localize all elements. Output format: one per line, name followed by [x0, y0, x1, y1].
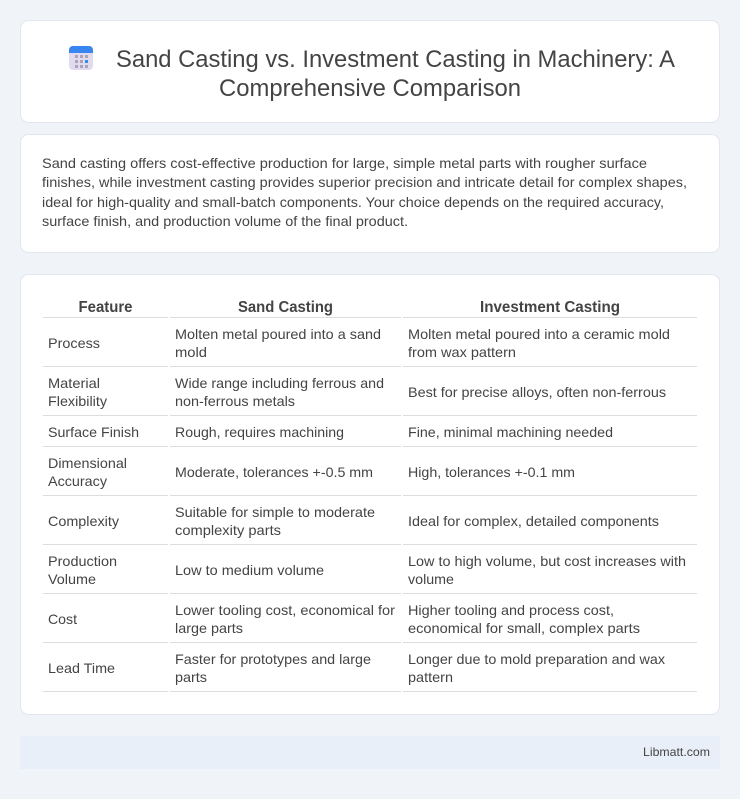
row: process: Molten metal poured into a ceramic mold — [408, 326, 670, 342]
row: lead time — [48, 651, 665, 685]
row: dimensional accuracy — [48, 455, 575, 489]
row: cost: Higher tooling and process cost, — [408, 602, 614, 618]
row: dimensional accuracy: Dimensional — [48, 455, 127, 471]
row: cost: large parts — [175, 620, 243, 636]
row: complexity: Complexity — [48, 513, 119, 529]
table header — [78, 299, 620, 316]
footer credit: Libmatt.com — [643, 745, 710, 759]
table header: Feature — [78, 299, 133, 316]
row: process: from wax pattern — [408, 344, 516, 360]
row: lead time: pattern — [408, 669, 453, 685]
row: surface finish: Surface Finish — [48, 424, 139, 440]
row: dimensional accuracy: Moderate, tolerances +-0.5 mm — [175, 464, 373, 480]
row: dimensional accuracy: High, tolerances +-0.1 mm — [408, 464, 575, 480]
panel: introduction — [20, 134, 720, 252]
row: lead time: Faster for prototypes and large — [175, 651, 371, 667]
intro text: surface finish, and production volume of the final product. — [42, 213, 408, 229]
row: process — [48, 326, 670, 360]
row: process: mold — [175, 344, 207, 360]
row: process: Process — [48, 335, 100, 351]
row: complexity: complexity parts — [175, 522, 281, 538]
row: production volume — [48, 553, 686, 587]
row: surface finish: Fine, minimal machining needed — [408, 424, 613, 440]
row: production volume: Low to medium volume — [175, 562, 324, 578]
table header: Investment Casting — [480, 299, 620, 316]
row: material flexibility: Material — [48, 375, 100, 391]
row: lead time: parts — [175, 669, 207, 685]
row: production volume: volume — [408, 571, 454, 587]
row: production volume: Volume — [48, 571, 96, 587]
row: cost — [48, 602, 640, 636]
title: Sand Casting vs. Investment Casting in Machinery: A — [116, 46, 675, 73]
row: material flexibility: Flexibility — [48, 393, 107, 409]
row: complexity — [48, 504, 659, 538]
row: production volume: Production — [48, 553, 117, 569]
row: surface finish — [48, 424, 613, 440]
intro text — [42, 155, 687, 229]
row: cost: Lower tooling cost, economical for — [175, 602, 395, 618]
icon: calendar — [69, 46, 93, 70]
row: process: Molten metal poured into a sand — [175, 326, 381, 342]
row: cost: economical for small, complex parts — [408, 620, 640, 636]
table header: Sand Casting — [238, 299, 333, 316]
intro text: Sand casting offers cost-effective production for large, simple metal parts with rougher surface — [42, 155, 647, 171]
panel: title card — [20, 20, 720, 122]
row: lead time: Lead Time — [48, 660, 115, 676]
row: material flexibility: non-ferrous metals — [175, 393, 295, 409]
row: complexity: Ideal for complex, detailed components — [408, 513, 659, 529]
row: complexity: Suitable for simple to moderate — [175, 504, 375, 520]
panel: comparison table — [20, 274, 720, 714]
row: cost: Cost — [48, 611, 77, 627]
row: production volume: Low to high volume, but cost increases with — [408, 553, 686, 569]
footer — [20, 736, 720, 769]
row: material flexibility — [48, 375, 666, 409]
row: material flexibility: Best for precise alloys, often non-ferrous — [408, 384, 666, 400]
title — [116, 46, 675, 102]
row: material flexibility: Wide range including ferrous and — [175, 375, 384, 391]
title: Comprehensive Comparison — [219, 75, 521, 102]
row: surface finish: Rough, requires machining — [175, 424, 344, 440]
row: dimensional accuracy: Accuracy — [48, 473, 107, 489]
intro text: ideal for high-quality and small-batch components. Your choice depends on the required accuracy, — [42, 194, 664, 210]
intro text: finishes, while investment casting provides superior precision and intricate detail for complex shapes, — [42, 174, 687, 190]
row dividers — [43, 317, 697, 692]
row: lead time: Longer due to mold preparation and wax — [408, 651, 665, 667]
